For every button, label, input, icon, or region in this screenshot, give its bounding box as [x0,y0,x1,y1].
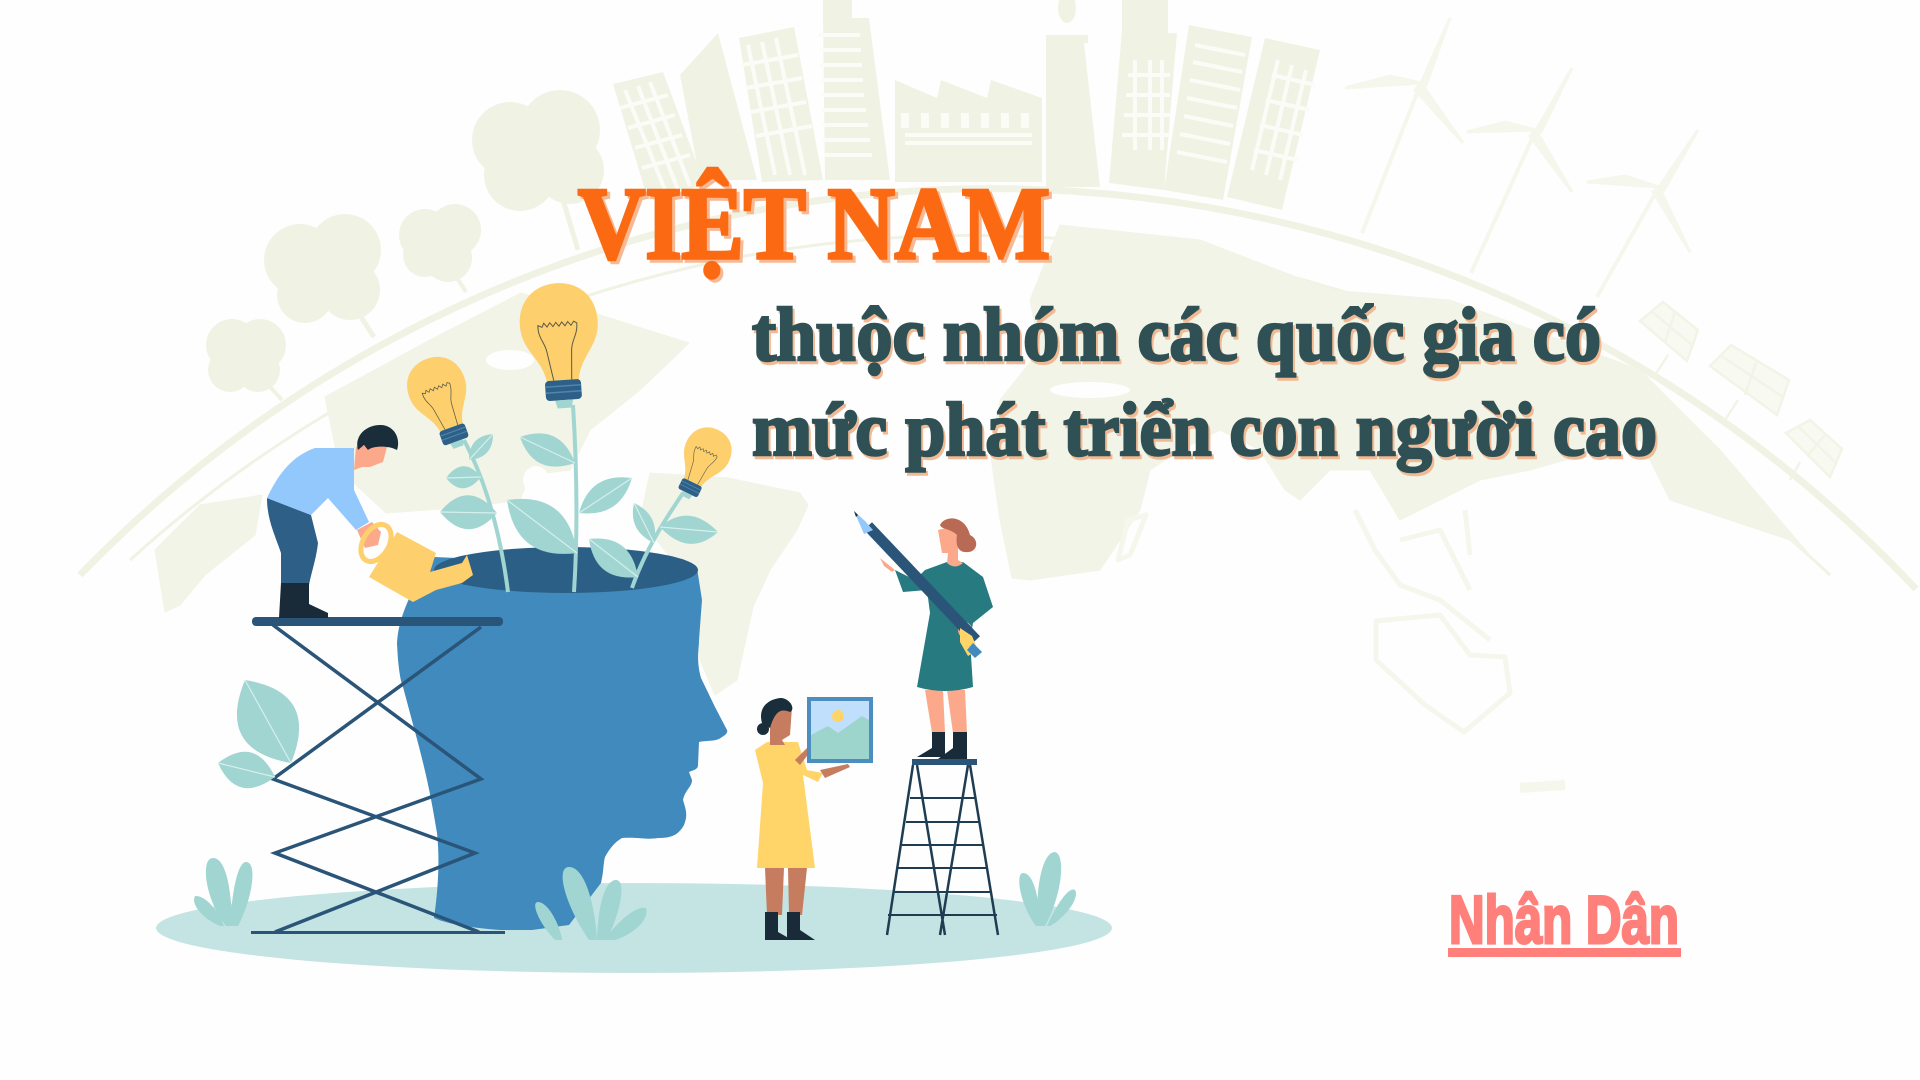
head opening [434,547,698,593]
trees [206,90,604,400]
wind turbines [1345,18,1698,297]
world map continents [155,225,1820,695]
side leaves [218,680,299,788]
islands and Australia outline [1118,510,1565,788]
building window grids [620,35,1315,190]
icon: medium light bulb [399,349,486,457]
woman with yellow dress holding picture [755,698,850,940]
picture frame [807,697,873,763]
solar panels [1640,302,1842,480]
head silhouette [397,547,727,930]
logo: Nhân Dân: Nhân Dân [1449,882,1679,958]
plant stems and leaves in head [440,405,718,592]
subtitle line 2: mức phát triển con người cao [752,388,1657,472]
icon: small light bulb [664,420,739,508]
ground plants left [194,858,252,926]
title: VIỆT NAM: VIỆT NAM [578,167,1050,281]
scissor lift [251,617,505,934]
ground plants right [1019,852,1076,926]
stepladder [887,759,998,935]
city buildings and factory [613,0,1320,210]
woman in teal dress on ladder [880,518,993,759]
ground plants middle [535,867,647,940]
subtitle line 1: thuộc nhóm các quốc gia có [752,293,1601,377]
icon: large light bulb [517,281,604,411]
panel: pale globe background [80,0,1916,788]
pencil [854,511,982,658]
ground ellipse [156,883,1112,973]
map gaps [486,350,1130,494]
man watering the head [267,425,398,618]
globe arc [80,189,1916,589]
watering can [355,519,473,602]
